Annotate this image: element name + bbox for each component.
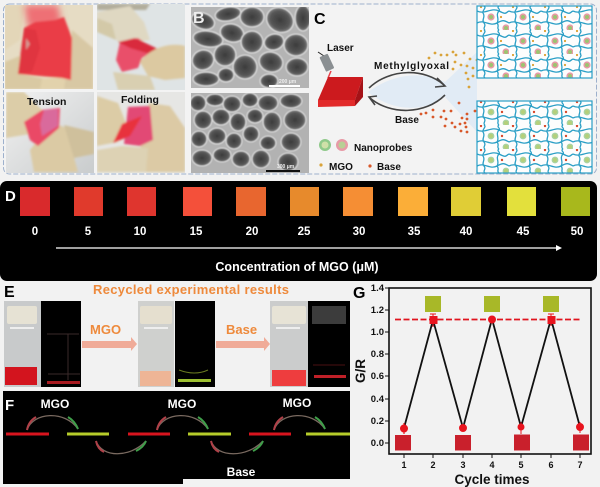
x axis ticks and labels: 5 <box>518 460 524 470</box>
y axis title: G/R <box>353 359 368 383</box>
panel D: colour strip <box>0 181 597 281</box>
legend: MGO and base <box>319 162 401 173</box>
concentration labels: 45 <box>517 226 530 238</box>
icon: laser device <box>318 52 334 78</box>
MGO particles <box>428 51 478 88</box>
base label: Base <box>227 465 256 479</box>
y axis ticks and labels: 1.0 <box>371 327 384 338</box>
photo: tension: Tension <box>27 96 66 108</box>
colour squares <box>20 187 590 216</box>
red swatches <box>395 434 589 450</box>
black background <box>3 391 350 484</box>
arrow: MGO: MGO <box>90 322 121 337</box>
x axis title: Cycle times <box>454 472 530 487</box>
photo: pinched film <box>97 4 185 90</box>
network: MGO state <box>477 6 592 78</box>
panel E: vial photos <box>4 282 350 387</box>
vial 1 fluorescence <box>41 301 81 387</box>
legend: nanoprobes: Nanoprobes <box>354 143 413 154</box>
concentration labels: 35 <box>408 226 421 238</box>
y axis ticks and labels: 1.4 <box>371 283 385 294</box>
concentration labels: 10 <box>134 226 146 238</box>
photo: tension <box>6 92 94 173</box>
x axis ticks and labels: 1 <box>401 460 407 470</box>
legend: MGO and base: Base <box>377 162 401 173</box>
y axis ticks and labels: 0.6 <box>371 371 384 382</box>
photo: folding: Folding <box>121 94 159 106</box>
y axis ticks and labels <box>371 283 389 449</box>
network: base state <box>477 101 592 173</box>
panel A: hydrogel photos <box>5 4 185 173</box>
x axis ticks and labels: 4 <box>489 460 495 470</box>
x axis ticks and labels: 3 <box>460 460 466 470</box>
black background <box>0 181 597 281</box>
panel F: reversibility strip <box>3 391 350 484</box>
concentration labels: 0 <box>32 226 38 238</box>
data points <box>400 314 584 434</box>
axis title: Concentration of MGO (μM) <box>215 260 379 274</box>
x axis ticks and labels: 7 <box>577 460 583 470</box>
photo: folding <box>97 92 185 173</box>
base particles <box>420 102 476 133</box>
test strips <box>6 432 350 436</box>
concentration labels: 5 <box>85 226 92 238</box>
concentration labels: 20 <box>246 226 258 238</box>
plot frame <box>389 288 591 454</box>
MGO labels <box>41 396 311 411</box>
letter F: F <box>5 397 14 414</box>
legend: MGO and base: MGO <box>329 162 353 173</box>
label: Methylglyoxal: Methylglyoxal <box>374 61 449 72</box>
y axis ticks and labels: 1.2 <box>371 305 384 316</box>
fan: light blue <box>368 52 477 132</box>
concentration labels: 15 <box>190 226 203 238</box>
panel C: reversible schematic <box>314 6 592 173</box>
MGO labels: MGO <box>283 396 311 410</box>
label: Laser: Laser <box>327 43 354 54</box>
letter E: E <box>4 284 15 301</box>
label: Base: Base <box>395 115 419 126</box>
icon: red hydrogel block <box>318 77 363 107</box>
x axis ticks and labels: 6 <box>548 460 554 470</box>
arrow: forward <box>369 73 445 88</box>
arrow: Base: Base <box>226 322 257 337</box>
concentration labels: 25 <box>298 226 311 238</box>
arrow: increasing concentration <box>56 245 562 251</box>
letter B: B <box>193 10 205 27</box>
SEM image top <box>191 7 309 88</box>
vial 3 fluorescence <box>308 301 350 387</box>
x axis ticks and labels <box>401 454 583 470</box>
vial 2 fluorescence <box>175 301 215 387</box>
scale bar top: 200 μm <box>279 79 297 85</box>
dashed reference line <box>395 318 580 320</box>
arrow: back <box>369 95 445 110</box>
scale bar bottom: 300 μm <box>277 164 295 170</box>
heading: Recycled experimental results <box>93 282 289 297</box>
photo: flat film <box>5 5 93 89</box>
arrow: Base <box>216 322 270 351</box>
vial 1 <box>4 301 41 387</box>
concentration labels: 40 <box>460 226 472 238</box>
y axis ticks and labels: 0.8 <box>371 349 384 360</box>
data line <box>404 319 580 428</box>
panel B: SEM micrographs <box>189 3 311 173</box>
panel G: G/R line chart <box>353 283 591 487</box>
SEM image bottom <box>191 93 309 173</box>
concentration labels: 50 <box>571 226 583 238</box>
letter D: D <box>5 188 16 205</box>
arcs: MGO <box>27 416 325 430</box>
legend: nanoprobes <box>319 139 413 154</box>
panel border: A to C <box>4 4 596 174</box>
x axis ticks and labels: 2 <box>430 460 436 470</box>
MGO labels: MGO <box>168 397 196 411</box>
arcs: Base <box>96 441 263 454</box>
arrow: MGO <box>82 322 137 351</box>
letter C: C <box>314 11 326 28</box>
concentration labels <box>32 226 583 238</box>
y axis ticks and labels: 0.2 <box>371 416 384 427</box>
MGO labels: MGO <box>41 397 69 411</box>
scale bar bottom <box>266 164 300 172</box>
vial 2 <box>138 301 174 387</box>
y axis ticks and labels: 0.0 <box>371 438 384 449</box>
green swatches <box>425 296 559 312</box>
vial 3 <box>270 301 308 387</box>
concentration labels: 30 <box>353 226 365 238</box>
y axis ticks and labels: 0.4 <box>371 394 385 405</box>
scale bar top <box>269 79 300 87</box>
letter G: G <box>353 285 365 302</box>
